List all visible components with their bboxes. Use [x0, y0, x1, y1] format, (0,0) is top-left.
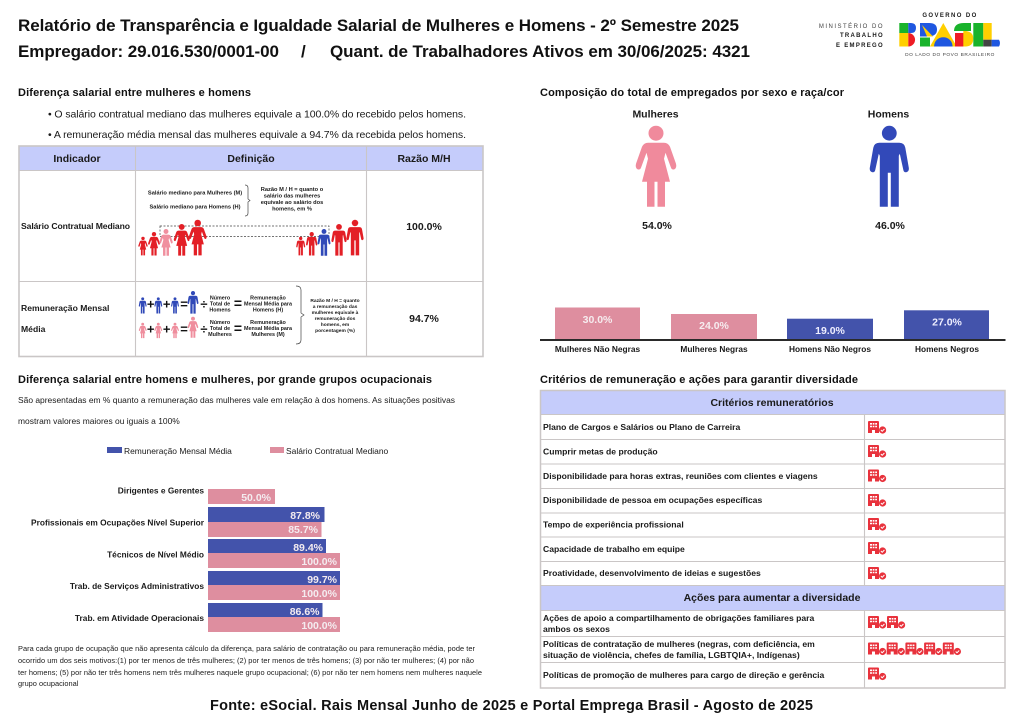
bars: dirigentes e gerentes: 50.0%: [241, 492, 272, 504]
bars: serviços administrativos: 100.0%: [301, 588, 338, 600]
diagram: remuneração média: Remuneração: [250, 296, 287, 302]
diagram: salário mediano: salário das mulheres: [264, 194, 320, 200]
pictogram: mulheres: [632, 108, 679, 232]
value: remuneração mensal: 94.7%: [409, 313, 440, 325]
diagram: remuneração média: =: [234, 295, 242, 311]
diagram: remuneração média: Número: [210, 320, 231, 326]
pictogram: mulheres: Mulheres: [632, 108, 679, 120]
diagram: remuneração média: Mulheres (M): [251, 332, 285, 338]
bars: serviços administrativos: Trab. de Serviços Administrativos: [70, 581, 204, 591]
diagram: remuneração média: +: [147, 296, 155, 312]
diagram: remuneração média: Razão M / H = quanto: [310, 298, 360, 304]
text block: nota: [18, 644, 482, 688]
row: horas extras: Disponibilidade para horas extras, reuniões com clientes e viagens: [543, 471, 818, 481]
logo: Governo do Brasil: GOVERNO DO: [922, 13, 978, 19]
row label: remuneração mensal: [21, 303, 109, 334]
bars: atividade operacionais: [75, 603, 340, 632]
diagram: remuneração média: Homens: [209, 308, 231, 314]
logo: Governo do Brasil: DO LADO DO POVO BRASILEIRO: [905, 52, 995, 58]
panel: tabela de indicadores: Indicador: [53, 153, 101, 165]
bars: profissionais: [31, 507, 324, 537]
diagram: remuneração média: Homens (H): [253, 308, 283, 314]
diagram: remuneração média: Total de: [210, 326, 230, 332]
heading: critérios: Critérios de remuneração e ações para garantir diversidade: [540, 374, 858, 386]
column chart: sexo e raça/cor: Homens Negros: [915, 344, 979, 354]
row: capacidade: [543, 542, 886, 555]
panel: tabela de indicadores: Razão M/H: [397, 153, 451, 165]
panel: tabela de critérios: [540, 390, 1005, 688]
row: políticas de contratação: Políticas de contratação de mulheres (negras, com deficiência, em: [543, 639, 815, 649]
text block: bullets: • A remuneração média mensal das mulheres equivale a 94.7% da recebida pelos homens.: [48, 129, 466, 141]
title: /: [301, 42, 306, 61]
title: Relatório de Transparência e Igualdade Salarial de Mulheres e Homens - 2º Semestre 2025: [18, 16, 739, 35]
text block: bullets: • O salário contratual mediano das mulheres equivale a 100.0% do recebido pelos homens.: [48, 108, 466, 120]
diagram: remuneração média: Mensal Média para: [244, 302, 293, 308]
heading: grupos ocupacionais: Diferença salarial entre homens e mulheres, por grande grupos ocupacionais: [18, 374, 432, 386]
diagram: remuneração média: homens, em: [321, 322, 350, 328]
row: ações de apoio: Ações de apoio a compartilhamento de obrigações familiares para: [543, 613, 814, 623]
diagram: remuneração média: Total de: [210, 302, 230, 308]
diagram: remuneração média: +: [163, 322, 171, 336]
column chart: sexo e raça/cor: [540, 308, 1006, 354]
row: ações de apoio: [543, 613, 905, 634]
logo: Ministério do Trabalho e Emprego: TRABALHO: [840, 33, 884, 39]
diagram: salário mediano: Razão M / H = quanto o: [261, 187, 324, 193]
pictogram: homens: 46.0%: [875, 220, 906, 232]
row: proatividade: Proatividade, desenvolvimento de ideias e sugestões: [543, 568, 761, 578]
legend: [107, 446, 389, 456]
row label: remuneração mensal: Média: [21, 324, 46, 334]
row: tempo de experiência: Tempo de experiência profissional: [543, 520, 684, 530]
row label: salário contratual: Salário Contratual Mediano: [21, 221, 130, 231]
bars: profissionais: 85.7%: [288, 524, 319, 536]
row: metas: [543, 445, 886, 458]
row: ações de apoio: ambos os sexos: [543, 624, 610, 634]
text block: nota: ter homens; (5) por não ter três homens nem três mulheres naquele grupo ocupacional; (6) por não ter nem homens nem mulheres naquele: [18, 668, 482, 677]
panel: tabela de critérios: Critérios remuneratórios: [710, 397, 834, 409]
bars: técnicos: [107, 539, 340, 568]
column chart: sexo e raça/cor: Homens Não Negros: [789, 344, 871, 354]
row: plano de cargos: [543, 421, 886, 434]
bars: profissionais: 87.8%: [290, 510, 321, 522]
text block: nota: grupo ocupacional: [18, 679, 79, 688]
bars: serviços administrativos: 99.7%: [307, 574, 338, 586]
bars: atividade operacionais: 86.6%: [290, 606, 320, 618]
pictogram: mulheres: 54.0%: [642, 220, 673, 232]
diagram: remuneração média: =: [234, 320, 242, 336]
bars: dirigentes e gerentes: Dirigentes e Gerentes: [118, 486, 204, 496]
diagram: remuneração média: =: [180, 322, 188, 336]
row: ocupações específicas: [543, 494, 886, 507]
bars: atividade operacionais: 100.0%: [301, 620, 338, 632]
value: salário contratual: 100.0%: [406, 221, 442, 233]
text block: nota: ocorrido um dos seis motivos:(1) por ter menos de três mulheres; (2) por ter menos de três homens; (3) por não ter mulheres; (4) por não: [18, 656, 474, 665]
pictogram: homens: [868, 108, 909, 232]
text block: explicação: mostram valores maiores ou iguais a 100%: [18, 416, 180, 426]
bars: técnicos: Técnicos de Nível Médio: [107, 550, 204, 560]
diagram: remuneração média: =: [180, 296, 188, 312]
bar chart: grupos ocupacionais: [31, 486, 340, 632]
row: ocupações específicas: Disponibilidade de pessoa em ocupações específicas: [543, 495, 762, 505]
text block: explicação: [18, 395, 455, 426]
diagram: remuneração média: +: [163, 296, 171, 312]
row: tempo de experiência: [543, 518, 886, 531]
diagram: remuneração média: Remuneração: [250, 320, 287, 326]
diagram: salário mediano: Salário mediano para Homens (H): [149, 204, 241, 210]
diagram: remuneração média: Mensal Média para: [244, 326, 293, 332]
row: políticas de promoção: Políticas de promoção de mulheres para cargo de direção e gerência: [543, 670, 825, 680]
logo: Ministério do Trabalho e Emprego: [819, 23, 884, 49]
title: [18, 16, 750, 61]
title: Quant. de Trabalhadores Ativos em 30/06/2025: 4321: [330, 42, 750, 61]
title: Empregador: 29.016.530/0001-00: [18, 42, 279, 61]
diagram: remuneração média: porcentagem (%): [315, 328, 355, 334]
bars: serviços administrativos: [70, 571, 340, 600]
row: políticas de contratação: situação de violência, chefes de família, LGBTQIA+, Indígenas): [543, 650, 800, 660]
row: horas extras: [543, 470, 886, 482]
row: plano de cargos: Plano de Cargos e Salários ou Plano de Carreira: [543, 422, 740, 432]
panel: tabela de critérios: Ações para aumentar a diversidade: [684, 592, 861, 604]
panel: tabela de indicadores: Definição: [227, 153, 275, 165]
diagram: salário mediano: [138, 185, 364, 256]
logo: Ministério do Trabalho e Emprego: E EMPREGO: [836, 43, 884, 49]
column chart: sexo e raça/cor: 30.0%: [583, 314, 613, 326]
heading: composição: Composição do total de empregados por sexo e raça/cor: [540, 87, 845, 99]
diagram: remuneração média: Mulheres: [208, 332, 232, 338]
text block: bullets: [48, 108, 466, 141]
bars: técnicos: 89.4%: [293, 542, 324, 554]
column chart: sexo e raça/cor: Mulheres Não Negras: [555, 344, 641, 354]
row label: remuneração mensal: Remuneração Mensal: [21, 303, 109, 313]
diagram: remuneração média: +: [147, 322, 155, 336]
row: proatividade: [543, 567, 886, 580]
column chart: sexo e raça/cor: 19.0%: [815, 325, 846, 337]
row: capacidade: Capacidade de trabalho em equipe: [543, 544, 685, 554]
column chart: sexo e raça/cor: 27.0%: [932, 316, 963, 328]
row: políticas de promoção: [543, 668, 886, 680]
diagram: remuneração média: remuneração dos: [315, 316, 356, 322]
column chart: sexo e raça/cor: Mulheres Negras: [680, 344, 748, 354]
diagram: remuneração média: [139, 286, 360, 344]
diagram: remuneração média: ÷: [200, 296, 208, 312]
diagram: remuneração média: a remuneração das: [313, 304, 358, 310]
diagram: salário mediano: equivale ao salário dos: [261, 200, 323, 206]
bars: técnicos: 100.0%: [301, 556, 338, 568]
diagram: remuneração média: ÷: [200, 322, 208, 336]
bars: dirigentes e gerentes: [118, 486, 275, 504]
diagram: remuneração média: Número: [210, 296, 231, 302]
legend: Salário Contratual Mediano: [286, 446, 389, 456]
panel: tabela de indicadores: [19, 146, 483, 356]
legend: Remuneração Mensal Média: [124, 446, 232, 456]
heading: diferença salarial: Diferença salarial entre mulheres e homens: [18, 87, 251, 99]
bars: atividade operacionais: Trab. em Atividade Operacionais: [75, 613, 204, 623]
logo: Governo do Brasil: [899, 13, 1000, 58]
row: metas: Cumprir metas de produção: [543, 446, 658, 456]
column chart: sexo e raça/cor: 24.0%: [699, 320, 730, 332]
row: políticas de contratação: [543, 639, 961, 660]
text block: explicação: São apresentadas em % quanto a remuneração das mulheres vale em relação à dos homens. As situações positivas: [18, 395, 455, 405]
text block: nota: Para cada grupo de ocupação que não apresenta cálculo da diferença, para salário de contratação ou para remuneração média, pode ter: [18, 644, 476, 653]
bars: profissionais: Profissionais em Ocupações Nível Superior: [31, 518, 205, 528]
footer: fonte: Fonte: eSocial. Rais Mensal Junho de 2025 e Portal Emprega Brasil - Agosto de 2025: [210, 698, 813, 714]
diagram: salário mediano: Salário mediano para Mulheres (M): [148, 190, 242, 196]
logo: Ministério do Trabalho e Emprego: MINISTÉRIO DO: [819, 23, 884, 30]
diagram: remuneração média: mulheres equivale à: [312, 310, 359, 316]
pictogram: homens: Homens: [868, 108, 909, 120]
diagram: salário mediano: homens, em %: [272, 206, 312, 212]
